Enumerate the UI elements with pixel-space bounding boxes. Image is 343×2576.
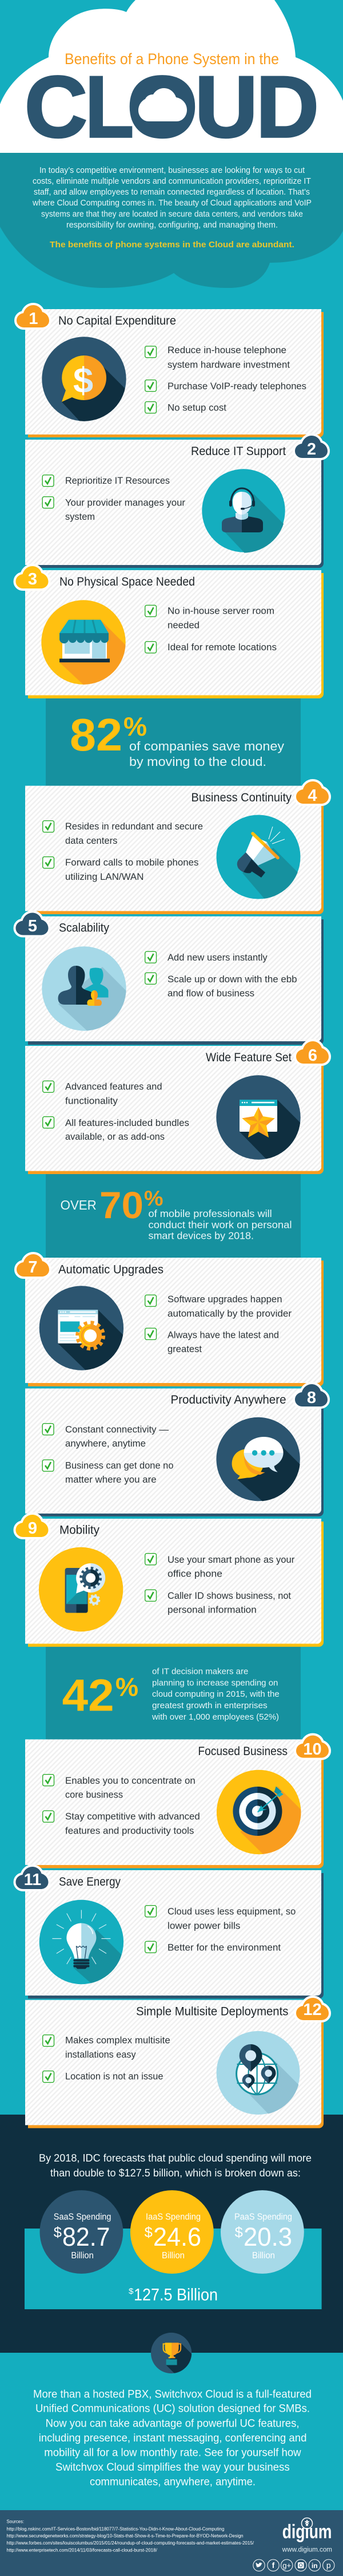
logo: digium: * xyxy=(305,2518,309,2531)
bullet list: available, or as add-ons xyxy=(65,1131,165,1142)
icon: dollar speech bubble: $ xyxy=(73,361,93,401)
chart: IaaS spending circle: $ xyxy=(145,2225,153,2241)
bullet list: Ideal for remote locations xyxy=(167,642,277,653)
panel: 5 Scalability xyxy=(16,912,324,1054)
bullet list: Always have the latest and xyxy=(167,1329,279,1341)
bullet list: Forward calls to mobile phones xyxy=(65,857,199,868)
stat callout: over 70%: of mobile professionals will xyxy=(149,1208,272,1219)
badge 3 xyxy=(16,566,48,588)
heading: Business Continuity xyxy=(191,791,292,804)
chart: IaaS spending circle: Billion xyxy=(162,2251,185,2261)
icon: dollar speech bubble xyxy=(42,337,126,421)
bullet list: Resides in redundant and secure xyxy=(65,821,203,832)
heading: Mobility xyxy=(59,1524,99,1537)
intro dark cloud xyxy=(0,153,343,288)
forecast intro text: By 2018, IDC forecasts that public cloud spending will more xyxy=(39,2152,312,2164)
icon: light bulb xyxy=(39,1899,123,1984)
forecast intro text: than double to $127.5 billion, which is broken down as: xyxy=(50,2167,301,2179)
stat callout: over 70%: conduct their work on personal xyxy=(149,1219,292,1231)
icon: megaphone xyxy=(216,815,301,899)
bullet list: and flow of business xyxy=(167,988,254,999)
stat callout: 82%: 82 xyxy=(70,709,122,760)
social icons: p xyxy=(326,2561,331,2570)
badge 6: 6 xyxy=(308,1046,317,1065)
bullet list xyxy=(145,1906,296,1953)
bullet list: office phone xyxy=(167,1568,222,1579)
dark navy section background xyxy=(0,2115,343,2353)
icon: smartphone with gears xyxy=(39,1547,123,1631)
closing paragraph: communicates, anywhere, anytime. xyxy=(90,2476,256,2488)
panel: 12 Simple Multisite Deployments xyxy=(25,1998,329,2139)
stat callout: 82%: by moving to the cloud. xyxy=(129,754,266,769)
badge 2 xyxy=(295,436,328,459)
heading: Focused Business xyxy=(198,1745,288,1758)
panel: 4 Business Continuity xyxy=(25,781,329,929)
bullet list: Reprioritize IT Resources xyxy=(65,475,170,486)
stat callout: over 70%: smart devices by 2018. xyxy=(149,1230,254,1242)
forecast intro text xyxy=(39,2152,312,2179)
stat callout: 82%: % xyxy=(123,712,147,741)
bullet list: Better for the environment xyxy=(167,1942,281,1953)
panel: 8 Productivity Anywhere xyxy=(25,1384,328,1522)
chart: SaaS spending circle: Billion xyxy=(71,2251,94,2261)
sources list: http://www.securedgenetworks.com/strategy-blog/10-Stats-that-Show-it-s-Time-to-Prepare-for-BYOD-Network-Design xyxy=(7,2534,244,2539)
intro text block: where Cloud Computing comes in. The beauty of Cloud applications and VoIP xyxy=(32,199,312,208)
closing paragraph: Now you can take advantage of powerful UC features, xyxy=(46,2417,299,2429)
intro text block: In today’s competitive environment, businesses are looking for ways to cut xyxy=(39,166,305,175)
social icons: f xyxy=(272,2561,275,2570)
bullet list xyxy=(145,605,277,653)
bullet list xyxy=(145,951,297,999)
sources list: http://www.enterprisetech.com/2014/11/03/forecasts-call-cloud-burst-2018/ xyxy=(7,2547,158,2553)
title word: CLOUD: O xyxy=(127,58,198,156)
badge 10: 10 xyxy=(303,1740,322,1759)
title word: CLOUD xyxy=(25,58,319,156)
total spending figure: 127.5 Billion xyxy=(134,2285,218,2304)
heading: No Capital Expenditure xyxy=(58,314,176,327)
bullet list: Makes complex multisite xyxy=(65,2034,170,2046)
intro text block: responsibility for owning, configuring, and managing them. xyxy=(66,221,278,230)
badge 1 xyxy=(17,305,49,328)
icon: cloud inside the O xyxy=(137,82,188,132)
chart: PaaS spending circle: PaaS Spending xyxy=(234,2212,292,2222)
bullet list: system hardware investment xyxy=(167,359,290,370)
bullet list: installations easy xyxy=(65,2049,136,2060)
intro text block: systems are that they are located in secure data centers, and vendors take xyxy=(41,210,303,219)
stat callout: 42%: % xyxy=(115,1673,138,1702)
stat callout: 82%: of companies save money xyxy=(129,739,285,753)
heading: Simple Multisite Deployments xyxy=(136,2005,288,2018)
social icons xyxy=(253,2559,334,2571)
sources list: http://blog.nskinc.com/IT-Services-Boston/bid/118077/7-Statistics-You-Didn-t-Know-About-Cloud-Computing xyxy=(7,2527,224,2532)
chart: PaaS spending circle: $ xyxy=(235,2225,243,2241)
intro text block xyxy=(32,166,312,230)
heading: Wide Feature Set xyxy=(206,1051,292,1064)
icon: software window with gear xyxy=(39,1286,123,1370)
chart: SaaS spending circle xyxy=(39,2190,123,2274)
stat callout: 82% xyxy=(70,709,285,769)
badge 4 xyxy=(296,781,329,805)
badge 11 xyxy=(16,1867,48,1889)
bullet list: personal information xyxy=(167,1604,257,1615)
stat callout: over 70% xyxy=(61,1184,292,1242)
chart: IaaS spending circle: IaaS Spending xyxy=(146,2212,201,2222)
badge 12 xyxy=(296,1998,329,2020)
chart: SaaS spending circle: 82.7 xyxy=(62,2222,110,2251)
stat callout: 42%: of IT decision makers are xyxy=(152,1666,248,1676)
panel: 1 No Capital Expenditure xyxy=(17,305,324,451)
badge 7: 7 xyxy=(28,1258,37,1277)
bullet list: anywhere, anytime xyxy=(65,1438,146,1449)
badge 10 xyxy=(296,1736,329,1759)
sources list: Sources: xyxy=(7,2519,24,2524)
title line: Benefits of a Phone System in the xyxy=(65,50,279,68)
bullet list: Your provider manages your xyxy=(65,497,185,508)
stat callout: 42% xyxy=(62,1666,280,1722)
chart: SaaS spending circle: SaaS Spending xyxy=(54,2212,111,2222)
bullet list xyxy=(43,2034,170,2083)
social icons: g+ xyxy=(282,2561,291,2570)
logo: digium: www.digium.com xyxy=(282,2546,332,2553)
bullet list xyxy=(145,1294,292,1354)
intro text block: staff, and allow employees to remain connected regardless of location. That’s xyxy=(34,188,310,197)
icon: globe with location pins xyxy=(216,2031,300,2115)
badge 9 xyxy=(16,1515,48,1538)
bullet list: No setup cost xyxy=(167,402,226,413)
bullet list: Business can get done no xyxy=(65,1460,174,1471)
chart: PaaS spending circle xyxy=(221,2190,304,2274)
bullet list: Stay competitive with advanced xyxy=(65,1811,200,1822)
closing paragraph xyxy=(33,2388,312,2488)
bullet list xyxy=(43,821,203,882)
chart: IaaS spending circle: 24.6 xyxy=(153,2222,201,2251)
bullet list xyxy=(43,1081,189,1142)
title word: CLOUD: U xyxy=(195,58,258,156)
bullet list: Purchase VoIP-ready telephones xyxy=(167,381,306,392)
badge 4: 4 xyxy=(308,787,317,805)
closing paragraph: including presence, instant messaging, conferencing and xyxy=(39,2432,306,2444)
title word: CLOUD: D xyxy=(256,58,319,156)
closing paragraph: More than a hosted PBX, Switchvox Cloud is a full-featured xyxy=(33,2388,312,2400)
heading: Productivity Anywhere xyxy=(170,1393,286,1406)
bullet list: utilizing LAN/WAN xyxy=(65,871,143,882)
bullet list: Use your smart phone as your xyxy=(167,1554,295,1565)
bullet list: system xyxy=(65,511,95,522)
icon: support agent with headset xyxy=(202,469,285,553)
bullet list: Scale up or down with the ebb xyxy=(167,974,297,985)
bullet list xyxy=(145,1554,295,1615)
stat band backgrounds xyxy=(46,693,301,1740)
badge 6 xyxy=(296,1041,329,1065)
panel: 11 Save Energy xyxy=(16,1867,324,2005)
bullet list xyxy=(43,1775,200,1836)
panel: footer xyxy=(0,2510,343,2576)
bullet list: Cloud uses less equipment, so xyxy=(167,1906,296,1917)
panel: spending total background xyxy=(25,2229,322,2309)
bullet list: Constant connectivity — xyxy=(65,1424,169,1435)
title word: CLOUD: C xyxy=(25,58,87,156)
panel: 6 Wide Feature Set xyxy=(25,1041,329,1180)
heading: Scalability xyxy=(59,922,109,934)
bullet list: features and productivity tools xyxy=(65,1825,194,1836)
chart: PaaS spending circle: 20.3 xyxy=(244,2222,292,2251)
badge 12: 12 xyxy=(303,2001,322,2019)
stat callout: over 70%: % xyxy=(144,1187,163,1210)
icon: storefront xyxy=(41,600,126,685)
closing paragraph: mobility all for a low monthly rate. See for yourself how xyxy=(44,2447,301,2459)
closing paragraph: Unified Communications (UC) solution designed for SMBs. xyxy=(35,2403,310,2415)
panel: 10 Focused Business xyxy=(25,1736,329,1878)
panel: 9 Mobility xyxy=(16,1515,324,1647)
badge 5 xyxy=(16,912,48,935)
bullet list: needed xyxy=(167,619,200,631)
bullet list: Enables you to concentrate on xyxy=(65,1775,196,1786)
sources list: http://www.forbes.com/sites/louiscolumbus/2015/01/24/roundup-of-cloud-computing-forecasts-and-market-estimates-2015/ xyxy=(7,2541,254,2546)
intro highlight: The benefits of phone systems in the Cloud are abundant. xyxy=(50,240,294,250)
badge 8: 8 xyxy=(307,1389,316,1407)
bullet list xyxy=(42,1424,174,1485)
bullet list: core business xyxy=(65,1789,123,1800)
logo: digium xyxy=(282,2518,332,2553)
icon: starred browser window xyxy=(216,1075,301,1160)
bullet list: Add new users instantly xyxy=(167,952,268,963)
sources list xyxy=(7,2519,254,2553)
total spending figure: $ xyxy=(129,2286,134,2296)
heading: No Physical Space Needed xyxy=(59,575,195,588)
badge 11: 11 xyxy=(24,1871,41,1889)
bullet list xyxy=(42,475,185,522)
heading: Save Energy xyxy=(59,1875,121,1888)
bullet list: matter where you are xyxy=(65,1474,157,1485)
bullet list: Caller ID shows business, not xyxy=(167,1590,291,1601)
badge 9: 9 xyxy=(28,1519,37,1538)
icon: group of users xyxy=(42,946,126,1031)
stat callout: 42%: 42 xyxy=(62,1670,114,1721)
bullet list: Advanced features and xyxy=(65,1081,162,1092)
icon: trophy xyxy=(151,2332,192,2373)
heading: Reduce IT Support xyxy=(191,445,286,458)
bullet list xyxy=(145,345,306,413)
bullet list: All features-included bundles xyxy=(65,1117,189,1128)
stat callout: over 70%: 70 xyxy=(99,1184,143,1226)
bullet list: greatest xyxy=(167,1344,202,1354)
bullet list: lower power bills xyxy=(167,1920,240,1931)
badge 7 xyxy=(17,1254,49,1277)
icon: target with arrow xyxy=(216,1770,301,1855)
badge 1: 1 xyxy=(29,310,38,328)
badge 5: 5 xyxy=(28,917,37,935)
icon: chat bubbles xyxy=(216,1417,300,1501)
bullet list: Location is not an issue xyxy=(65,2071,163,2081)
bullet list: Software upgrades happen xyxy=(167,1294,282,1305)
badge 3: 3 xyxy=(28,570,37,588)
stat callout: over 70%: OVER xyxy=(61,1198,97,1212)
stat callout: 42%: with over 1,000 employees (52%) xyxy=(151,1712,279,1722)
panel: 2 Reduce IT Support xyxy=(25,436,328,582)
badge 2: 2 xyxy=(307,440,316,459)
badge 8 xyxy=(295,1384,328,1407)
panel: 7 Automatic Upgrades xyxy=(17,1254,324,1394)
panel: 3 No Physical Space Needed xyxy=(16,566,324,709)
title word: CLOUD: L xyxy=(85,58,134,156)
stat callout: 42%: cloud computing in 2015, with the xyxy=(152,1689,280,1699)
chart: PaaS spending circle: Billion xyxy=(252,2251,275,2261)
stat callout: 42%: planning to increase spending on xyxy=(152,1678,278,1688)
intro text block: costs, eliminate multiple vendors and communication providers, reprioritize IT xyxy=(33,177,311,186)
bullet list: Reduce in-house telephone xyxy=(167,345,286,355)
heading: Automatic Upgrades xyxy=(58,1263,163,1277)
header white cloud xyxy=(0,0,343,153)
bullet list: data centers xyxy=(65,835,118,846)
social icons: in xyxy=(312,2562,318,2570)
chart: SaaS spending circle: $ xyxy=(54,2225,62,2241)
title xyxy=(25,50,319,156)
bullet list: automatically by the provider xyxy=(167,1308,292,1319)
icon: dollar speech bubble: $ xyxy=(73,361,93,401)
closing paragraph: Switchvox Cloud simplifies the way your business xyxy=(55,2462,290,2474)
chart: IaaS spending circle xyxy=(130,2190,214,2274)
bullet list: No in-house server room xyxy=(167,606,274,617)
stat callout: 42%: greatest growth in enterprises xyxy=(152,1701,268,1710)
bullet list: functionality xyxy=(65,1096,118,1106)
